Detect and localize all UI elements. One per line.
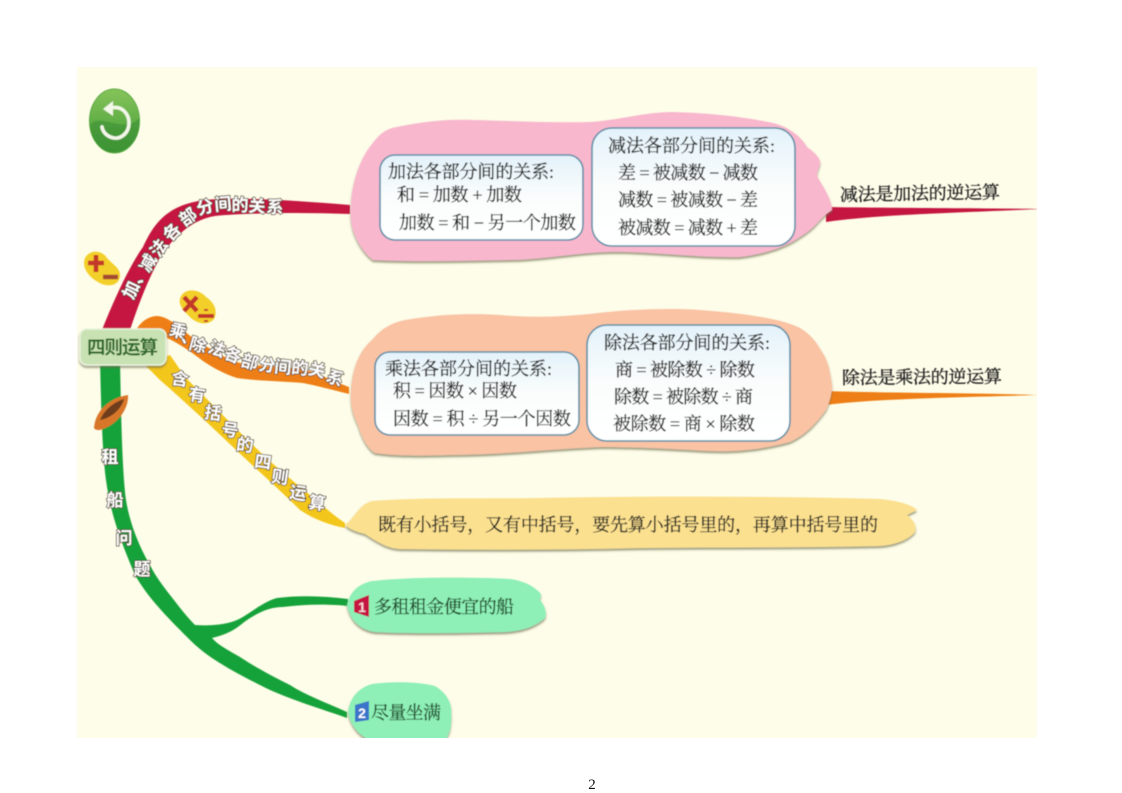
label: yellow branch characters: 则	[270, 467, 290, 488]
label: orange branch characters: 乘	[167, 320, 189, 343]
box: subtraction relations: 差 = 被减数 − 减数	[618, 163, 758, 183]
label: orange branch characters: 关	[306, 359, 327, 382]
label: orange branch characters: 、	[179, 327, 201, 350]
tail: subtraction inverse line	[826, 207, 1040, 222]
label: yellow branch characters: 号	[220, 420, 240, 441]
label: green branch characters: 船	[106, 491, 124, 510]
label: yellow branch characters: 运	[288, 483, 308, 504]
label: red branch characters: 加	[119, 278, 144, 302]
yellow blob	[345, 497, 917, 550]
box: addition relations: 加数 = 和 − 另一个加数	[399, 213, 576, 233]
panel: pink addition and subtraction	[351, 112, 832, 261]
branch: orange multiply divide	[136, 316, 349, 394]
box: addition relations: 和 = 加数 + 加数	[397, 185, 522, 205]
label: yellow branch characters: 四	[253, 452, 273, 473]
label: orange branch characters: 间	[274, 357, 292, 378]
box: multiplication relations: 积 = 因数 × 因数	[393, 381, 517, 401]
pink blob	[351, 112, 832, 261]
label: yellow branch characters: 含	[170, 368, 190, 390]
mint blob two	[348, 682, 451, 742]
icon: number 1 tag	[354, 595, 369, 617]
panel: bracket rule	[345, 497, 917, 550]
box: subtraction relations: 被减数 = 减数 + 差	[618, 218, 758, 238]
label: orange branch characters: 的	[291, 358, 309, 379]
box: division relations: 被除数 = 商 × 除数	[613, 414, 755, 434]
label: orange branch characters: 各	[221, 343, 245, 367]
mint blob one	[347, 578, 546, 633]
bracket rule text: 既有小括号，又有中括号，要先算小括号里的，再算中括号里的	[378, 515, 878, 535]
label: red branch characters	[119, 194, 284, 302]
label: orange branch characters: 法	[205, 337, 228, 361]
peach blob	[351, 309, 832, 456]
label: green branch characters: 问	[116, 529, 132, 548]
label: orange branch characters: 系	[323, 366, 347, 390]
box: division relations: 商 = 被除数 ÷ 除数	[615, 360, 755, 380]
label: orange branch characters: 除	[187, 333, 209, 357]
box: addition relations: 加法各部分间的关系:	[388, 162, 554, 182]
label: red branch characters: 的	[232, 196, 248, 215]
icon: number 2 tag: 2	[358, 705, 366, 721]
label: green branch characters	[102, 448, 150, 579]
label: red branch characters: 各	[159, 219, 185, 245]
label: red branch characters: 、	[127, 263, 152, 287]
box: addition relations	[380, 155, 583, 240]
panel: peach multiplication and division	[351, 309, 832, 456]
tail: division inverse line	[826, 391, 1038, 405]
icon: multiply divide	[180, 290, 216, 323]
label: subtraction inverse: 减法是加法的逆运算	[840, 182, 1000, 205]
box: subtraction relations	[592, 128, 795, 246]
label: yellow branch characters: 括	[203, 403, 223, 424]
branch: red add subtract	[102, 199, 350, 330]
label: division inverse: 除法是乘法的逆运算	[842, 367, 1002, 388]
box: division relations	[587, 325, 790, 441]
background panel	[77, 67, 1037, 738]
label: yellow branch characters: 有	[187, 385, 207, 406]
icon: back button	[90, 89, 140, 153]
label: red branch characters: 法	[147, 236, 172, 261]
label: red branch characters: 分	[194, 196, 216, 219]
label: red branch characters: 减	[136, 251, 161, 275]
label: green branch characters: 题	[134, 560, 150, 579]
label: orange branch characters: 部	[239, 350, 261, 374]
label: green branch characters: 租	[102, 448, 118, 467]
box: subtraction relations: 减数 = 被减数 − 差	[618, 190, 758, 210]
branch: green rental boats	[100, 360, 348, 718]
panel: option two	[348, 682, 451, 742]
box: division relations: 除数 = 被除数 ÷ 商	[614, 387, 753, 407]
option one text: 多租租金便宜的船	[374, 597, 514, 617]
label: red branch characters: 关	[248, 196, 266, 217]
icon: plus minus	[84, 252, 120, 285]
box: multiplication relations	[375, 352, 579, 435]
label: red branch characters: 系	[266, 196, 284, 218]
icon: boat	[94, 395, 128, 430]
box: division relations: 除法各部分间的关系:	[604, 333, 770, 353]
label: yellow branch characters: 的	[235, 435, 255, 456]
central node	[80, 329, 166, 365]
label: yellow branch characters: 算	[307, 492, 327, 514]
page number: 2	[588, 777, 596, 793]
label: red branch characters: 部	[175, 204, 201, 230]
label: orange branch characters	[167, 320, 347, 390]
label: yellow branch characters	[170, 368, 327, 514]
label: orange branch characters: 分	[257, 355, 277, 376]
box: multiplication relations: 乘法各部分间的关系:	[385, 359, 552, 379]
panel: option one	[347, 578, 546, 633]
branch: yellow brackets	[145, 355, 345, 528]
icon: number 1 tag: 1	[358, 599, 366, 615]
option two text: 尽量坐满	[371, 703, 441, 723]
label: red branch characters: 间	[214, 194, 232, 215]
box: subtraction relations: 减法各部分间的关系:	[608, 136, 775, 156]
central node: 四则运算	[87, 337, 158, 358]
box: multiplication relations: 因数 = 积 ÷ 另一个因数	[393, 409, 571, 429]
